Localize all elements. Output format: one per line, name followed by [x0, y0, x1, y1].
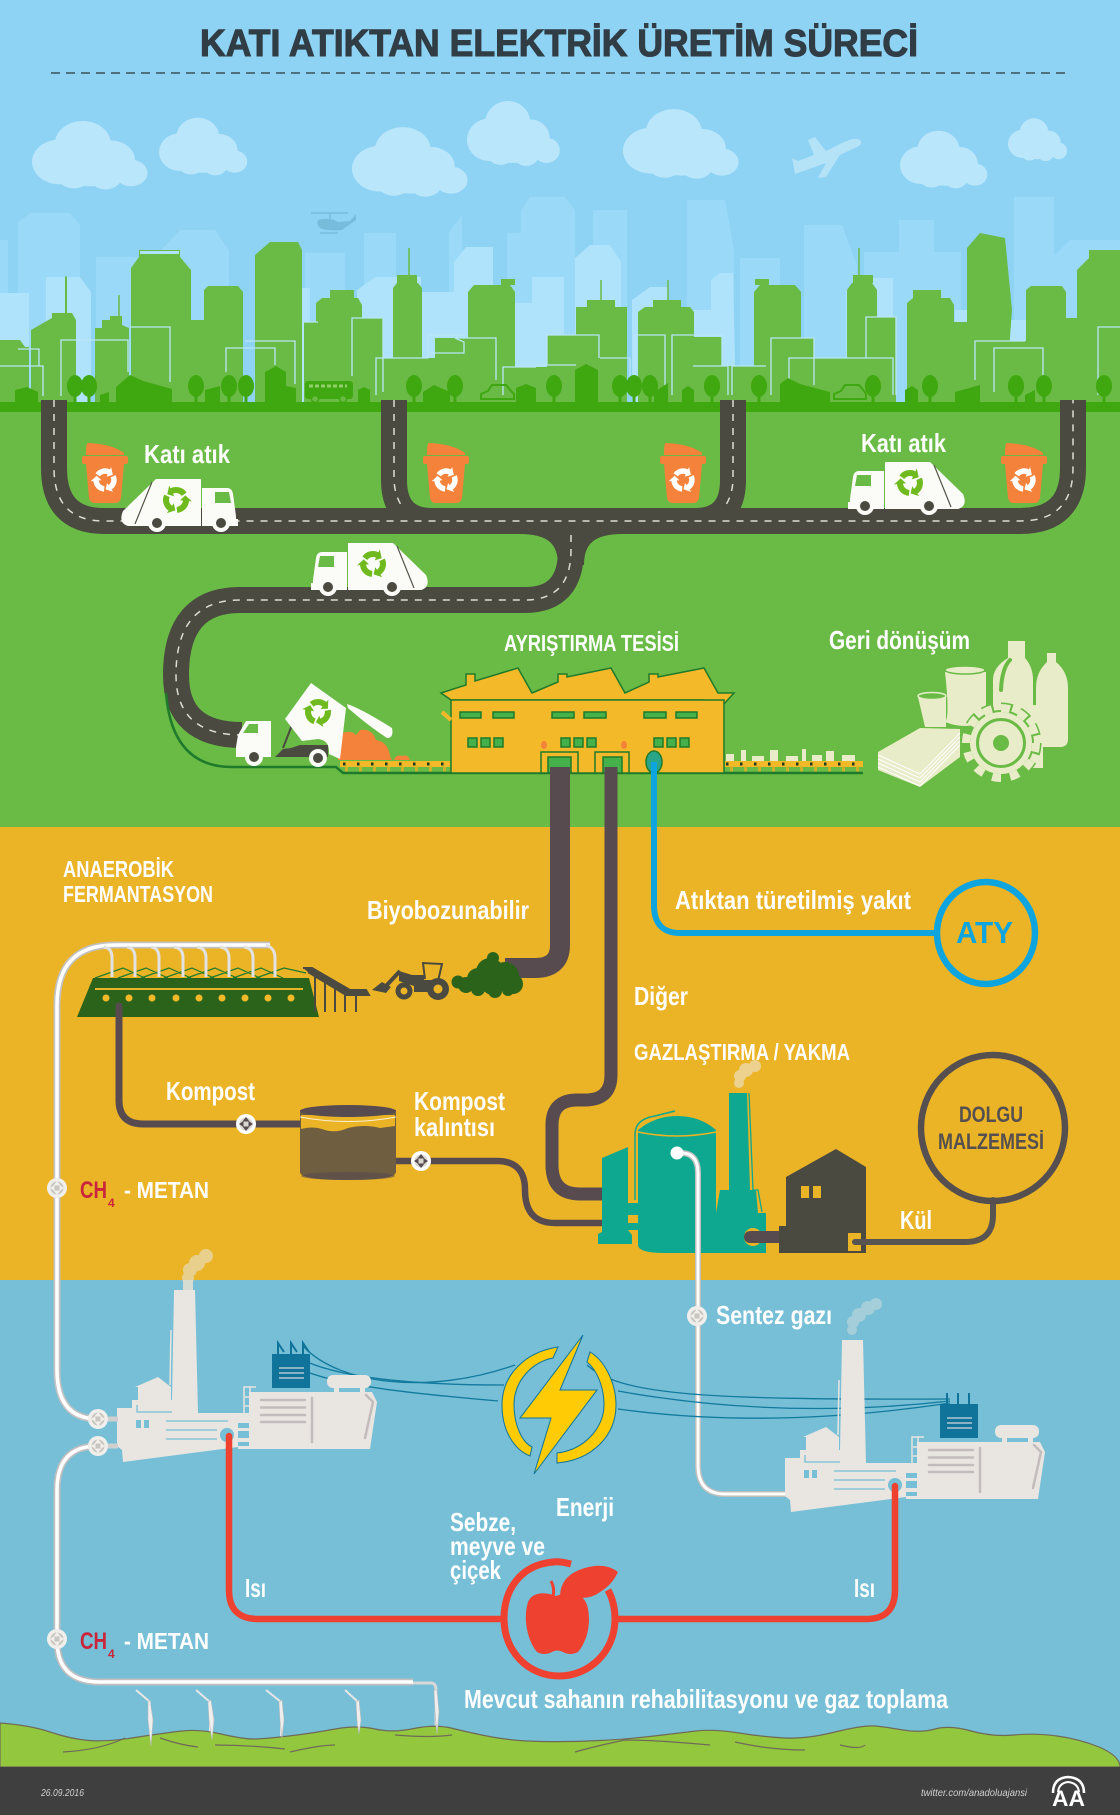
gasification plant: [598, 1093, 766, 1253]
power wires: [304, 1347, 950, 1418]
yellow processing panel: [0, 827, 1120, 1280]
ash house: [779, 1149, 866, 1253]
label: ash: Kül: [900, 1205, 932, 1235]
pipe: compost: [119, 1006, 312, 1124]
valve: syngas: [687, 1306, 707, 1326]
green ground panel: [0, 405, 1120, 827]
ATY circle: ATY: [956, 915, 1013, 950]
label: gasification: GAZLAŞTIRMA / YAKMA: [634, 1039, 850, 1065]
valve: methane lower: [47, 1629, 67, 1649]
methane label 2: [80, 1628, 209, 1661]
methane label 2: - METAN: [124, 1628, 209, 1654]
connector between plant and ash house: [744, 1228, 785, 1246]
white pipe: gas collection: [57, 1446, 436, 1744]
label: sorting facility: AYRIŞTIRMA TESİSİ: [504, 630, 679, 656]
white pipe: methane collection: [57, 945, 275, 1419]
label: refuse derived fuel: Atıktan türetilmiş yakıt: [675, 885, 911, 915]
label: heat right: Isı: [854, 1573, 875, 1603]
heat pipes: [229, 1436, 895, 1619]
right power plant: [785, 1340, 1045, 1512]
far skyline: [0, 197, 1120, 405]
clouds: [32, 101, 1067, 197]
pipe: compost residue: [395, 1161, 603, 1223]
label: vegetables, fruit and flowers: çiçek: [450, 1555, 501, 1585]
label: vegetables, fruit and flowers: [450, 1507, 545, 1585]
blue pipe: refuse derived fuel: [654, 762, 937, 933]
compost mound: [452, 952, 523, 998]
methane label 2: CH: [80, 1628, 107, 1655]
outlined buildings: [0, 317, 1120, 396]
label: compost residue: kalıntısı: [414, 1112, 495, 1142]
label: Katı atık left: Katı atık: [144, 439, 230, 469]
footer date: 26.09.2016: [40, 1788, 84, 1799]
conveyor baseline: [166, 693, 863, 773]
title: KATI ATIKTAN ELEKTRİK ÜRETİM SÜRECİ: [200, 22, 918, 65]
smoke: right plant: [847, 1298, 882, 1335]
label: anaerobic fermentation: FERMANTASYON: [63, 881, 213, 907]
label: heat left: Isı: [245, 1573, 266, 1603]
icon: airplane: [792, 137, 861, 178]
sorting factory: [441, 668, 734, 773]
syngas pipe: [681, 1153, 790, 1494]
left power plant: [117, 1290, 377, 1462]
pipe inlet on tank: [670, 1146, 684, 1160]
methane label 1: CH: [80, 1177, 107, 1204]
conveyor left: [340, 761, 450, 769]
icon: car: [481, 385, 866, 399]
methane label 1: [80, 1177, 209, 1210]
right plant insulators: [947, 1393, 969, 1404]
valve: compost: [236, 1114, 256, 1134]
digester feed ramp: [303, 968, 369, 1012]
valve: compost residue: [411, 1151, 431, 1171]
label: biodegradable: Biyobozunabilir: [367, 895, 529, 925]
smoke: left plant stem: [183, 1280, 193, 1290]
methane label 2: 4: [108, 1647, 115, 1661]
filling material circle: [921, 1055, 1065, 1201]
filling material circle: DOLGU: [959, 1102, 1023, 1127]
city skyline: green buildings: [0, 233, 1120, 405]
garbage trucks: [121, 462, 965, 596]
smoke: gasification: [734, 1060, 761, 1088]
pipe: ash: [855, 1200, 993, 1242]
conveyor right with recyclables: [725, 749, 863, 769]
icon: helicopter: [311, 213, 356, 233]
methane label 1: - METAN: [124, 1177, 209, 1203]
city foreground: trees, houses, vehicles: [0, 364, 1120, 412]
label: syngas: Sentez gazı: [716, 1300, 832, 1330]
valve: methane top: [47, 1178, 67, 1198]
blue energy panel: [0, 1280, 1120, 1767]
anaerobic digester: [77, 968, 319, 1017]
near pale skyline: [0, 245, 1030, 405]
icon: tractor: [372, 963, 449, 1000]
smoke: left plant: [182, 1249, 213, 1284]
label: vegetables, fruit and flowers: meyve ve: [450, 1531, 545, 1561]
label: compost residue: [414, 1086, 505, 1142]
dark pipe: other waste: [552, 767, 611, 1194]
label: vegetables, fruit and flowers: Sebze,: [450, 1507, 516, 1537]
label: energy: Enerji: [556, 1492, 614, 1522]
apple circle: [504, 1562, 618, 1676]
logo: Anadolu Agency: AA: [1052, 1786, 1085, 1811]
road network: [54, 400, 1073, 735]
footer twitter: twitter.com/anadoluajansi: [921, 1787, 1028, 1799]
label: compost residue: Kompost: [414, 1086, 505, 1116]
methane label 1: 4: [108, 1196, 115, 1210]
label: compost: Kompost: [166, 1076, 255, 1106]
filling material circle: MALZEMESİ: [938, 1129, 1044, 1154]
icon: bus: [305, 381, 353, 402]
gas well drills: [148, 1690, 439, 1746]
left plant insulators: [278, 1343, 309, 1354]
waste bins: [82, 443, 1047, 503]
ATY circle: [937, 882, 1035, 984]
dumping truck: [236, 683, 410, 767]
dark pipe: biodegradable waste: [505, 767, 560, 968]
label: other: Diğer: [634, 981, 688, 1011]
compost tank: [300, 1105, 396, 1180]
footer bar: [0, 1767, 1120, 1815]
label: Katı atık right: Katı atık: [861, 428, 946, 458]
left plant gas valves: [88, 1409, 118, 1456]
label: anaerobic fermentation: ANAEROBİK: [63, 856, 174, 882]
label: rehabilitation: Mevcut sahanın rehabilitasyonu ve gaz toplama: [464, 1684, 948, 1714]
label: anaerobic fermentation: [63, 856, 213, 907]
energy symbol: [502, 1335, 616, 1474]
landfill hills: [0, 1723, 1120, 1767]
road centre markings: [54, 400, 1073, 735]
label: recycling: Geri dönüşüm: [829, 625, 970, 655]
sky background: [0, 0, 1120, 405]
recyclables: bottles, paper, gear: [878, 641, 1068, 787]
